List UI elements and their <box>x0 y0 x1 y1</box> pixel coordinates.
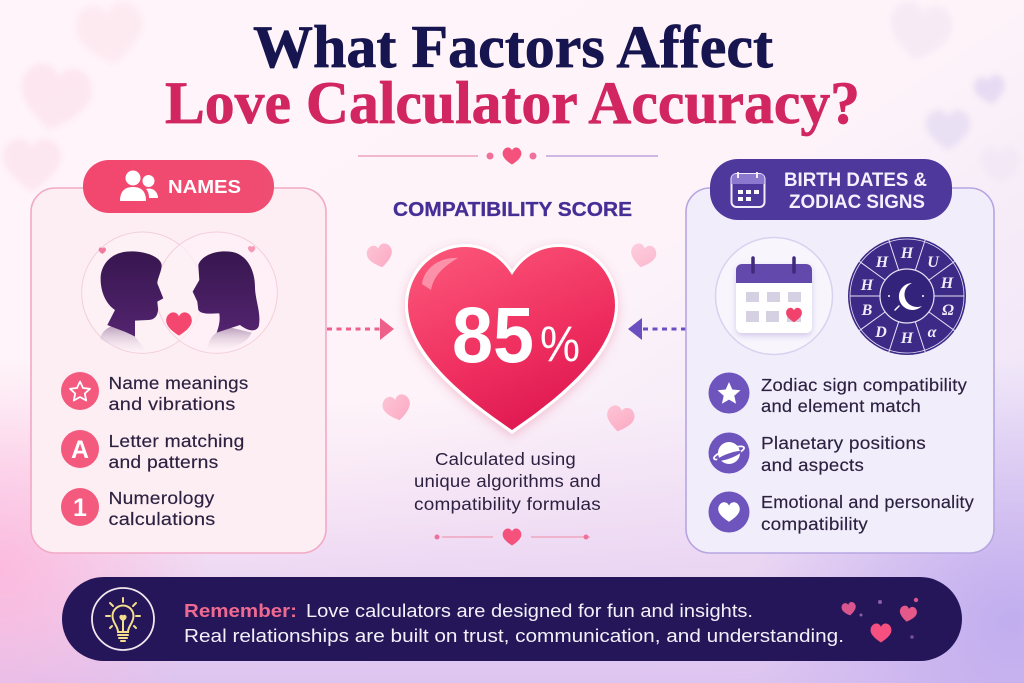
arrow: names to score <box>327 318 394 340</box>
zodiac glyphs: H <box>940 275 954 292</box>
item: letter matching: and patterns <box>108 452 219 472</box>
title divider with heart <box>358 148 658 164</box>
zodiac glyphs: H <box>900 330 914 347</box>
remember text: Love calculators are designed for fun and insights. <box>306 600 753 621</box>
item: zodiac sign compatibility: and element match <box>761 396 921 416</box>
item: emotional compatibility <box>708 492 974 534</box>
score value: 85 <box>452 290 534 379</box>
zodiac header pill <box>710 159 952 220</box>
illustration: silhouettes <box>82 232 277 353</box>
score value: % <box>540 316 580 372</box>
panel: birth dates and zodiac signs <box>686 159 994 553</box>
names panel card <box>31 188 326 553</box>
score caption: unique algorithms and <box>414 471 601 491</box>
zodiac glyphs: B <box>861 302 873 319</box>
callout: remember banner <box>62 577 962 661</box>
title <box>165 14 860 136</box>
names header pill <box>83 160 274 213</box>
zodiac glyphs: H <box>900 245 914 262</box>
score value <box>452 290 580 379</box>
item: name meanings <box>61 372 249 414</box>
remember text: Real relationships are built on trust, communication, and understanding. <box>184 625 844 646</box>
score caption: compatibility formulas <box>414 494 601 514</box>
zodiac heading: ZODIAC SIGNS <box>789 192 925 213</box>
zodiac glyphs <box>860 245 954 347</box>
item: name meanings: and vibrations <box>108 394 236 414</box>
item: numerology: calculations <box>108 509 216 529</box>
item: planetary positions: Planetary positions <box>761 433 926 453</box>
panel: names <box>31 160 326 553</box>
title: What Factors Affect <box>253 14 773 80</box>
icon: header calendar <box>732 172 764 207</box>
decorative hearts and sparkles <box>841 598 918 642</box>
item: letter matching: Letter matching <box>108 431 244 451</box>
item: numerology: Numerology <box>108 488 215 508</box>
item: emotional compatibility: compatibility <box>761 514 868 534</box>
title: Love Calculator Accuracy? <box>165 70 860 136</box>
item: numerology <box>61 488 216 529</box>
floating small hearts <box>365 242 658 434</box>
item: planetary positions <box>708 432 926 475</box>
item: letter matching <box>61 430 244 472</box>
arrow: zodiac to score <box>628 318 686 340</box>
zodiac glyphs: α <box>928 324 938 341</box>
score caption <box>414 449 601 514</box>
zodiac glyphs: Ω <box>942 302 954 319</box>
item: numerology: 1 <box>73 494 87 522</box>
zodiac heading <box>784 170 927 213</box>
panel: compatibility score <box>365 198 658 546</box>
score heading: COMPATIBILITY SCORE <box>393 198 632 221</box>
remember text <box>184 600 844 646</box>
big heart <box>405 244 618 434</box>
zodiac glyphs: H <box>860 277 874 294</box>
illustration: calendar <box>716 238 832 354</box>
illustration: zodiac wheel <box>848 237 966 355</box>
item: zodiac sign compatibility: Zodiac sign compatibility <box>761 375 967 395</box>
caption divider with heart <box>434 528 590 546</box>
item: planetary positions: and aspects <box>761 455 864 475</box>
zodiac glyphs: D <box>874 324 887 341</box>
zodiac heading: BIRTH DATES & <box>784 170 927 191</box>
item: emotional compatibility: Emotional and personality <box>761 492 974 512</box>
icon: people <box>120 170 158 201</box>
score caption: Calculated using <box>435 449 576 469</box>
names heading: NAMES <box>168 176 241 197</box>
zodiac panel card <box>686 188 994 553</box>
item: name meanings: Name meanings <box>108 373 249 393</box>
zodiac glyphs: H <box>875 254 889 271</box>
remember text: Remember: <box>184 600 297 621</box>
item: zodiac sign compatibility <box>708 372 967 416</box>
icon: lightbulb <box>92 588 154 650</box>
zodiac glyphs: U <box>927 254 940 271</box>
item: letter matching: A <box>71 436 89 464</box>
